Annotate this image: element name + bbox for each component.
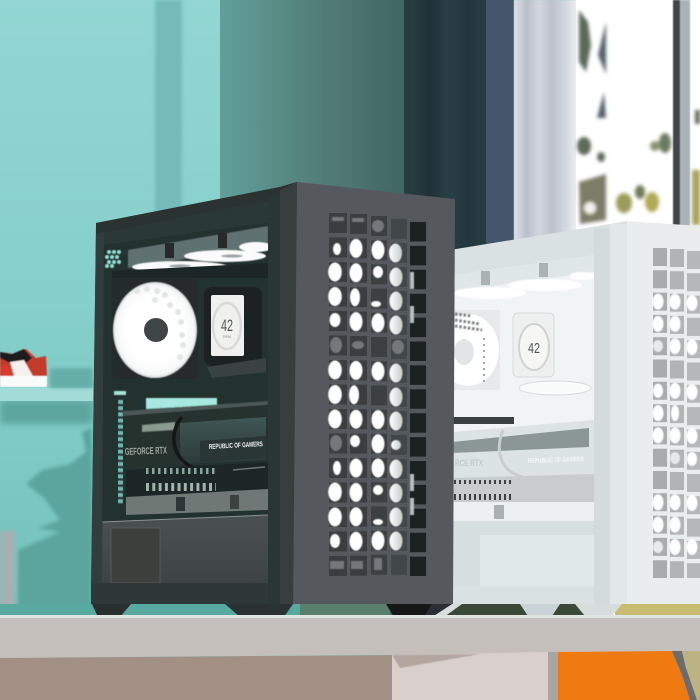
background: dark curtain [404,0,514,620]
black case: top fans [132,242,273,273]
below the shelf: divider [548,652,558,700]
white case: graphics card [452,420,594,498]
background: teal wall [0,0,410,620]
black case: side panel [293,182,455,604]
black case: side vent holes [328,213,418,576]
black case: bottom fans [126,489,268,515]
below the shelf: tan left compartment [0,655,392,700]
black case: motherboard slots [126,462,268,497]
white case: liquid cooler pump with temperature display: 42 [528,340,540,357]
black case: left frame edge [91,232,104,583]
white case: side fan [437,310,500,390]
white case: tube and dark strip [452,381,591,424]
table shelf [0,615,700,658]
black case: liquid cooler pump with temperature display [204,287,262,366]
black case: cooler tube [207,358,266,378]
orange cloth [558,651,690,700]
background: window frame [673,0,690,226]
black case: feet [92,604,452,617]
black case: light through vent column 3 [371,240,384,550]
below the shelf: pale compartment [392,652,548,700]
black case: expansion-slot mesh [119,400,122,505]
black case: corner pillar [280,182,297,604]
black case: dim light slivers in vent column 5 [410,272,414,515]
strip under the cases [0,604,700,618]
white case: light through vents [652,294,698,555]
black case: glass interior [101,223,273,583]
background: sheer white curtain [514,0,577,620]
black case: bottom frame [91,583,280,604]
white case: front face [450,221,627,604]
black case: PSU shroud [102,515,268,583]
black case: Republic of Gamers label: REPUBLIC OF GAMERS [209,441,263,451]
wall shadow of plant [18,428,92,612]
black case: liquid cooler pump with temperature display: RPM [223,335,231,339]
background: window and trees [576,0,700,620]
white case: side vent holes [652,248,698,578]
gray object at left edge [0,531,15,613]
below the shelf: right edge [672,651,700,700]
black case: top edge [96,182,297,234]
white case: side panel [627,221,700,604]
white case: graphics card: REPUBLIC OF GAMERS [528,456,585,465]
white case: graphics card: RCE RTX [455,458,483,468]
white case: glass interior [437,255,595,586]
black case: front face [91,182,297,604]
black case: mesh vent top left [105,250,121,268]
black case: GPU power cable [174,417,262,482]
black PC case [91,182,455,617]
white case: front frame pillar [594,224,627,604]
black case: light through vent column 4 [389,244,402,550]
black case: side intake fan [111,279,198,379]
black case: graphics card [125,405,268,482]
white case: top fans [454,272,595,299]
black case: light through vent column 2 [349,239,362,551]
black case: GeForce RTX label: GEFORCE RTX [125,446,167,458]
white case: feet [432,604,622,617]
black case: right frame [268,195,280,604]
white case: bottom shroud [452,502,594,586]
white case: motherboard slots [452,474,594,502]
black case: rail under top fans [112,263,268,278]
white case: liquid cooler pump with temperature display [513,313,554,377]
black case: light through vent column 1 [328,243,342,548]
black case: liquid cooler pump with temperature display: 42 [221,316,233,335]
black case: fan hub [144,318,168,342]
black case: light strip above graphics card [114,391,268,416]
black case: dim parts seen through the vents [330,217,404,570]
sneaker on shelf [0,349,47,387]
black case: top fan bracket [128,226,268,268]
wall shelf [0,368,93,424]
white PC case [432,221,700,617]
